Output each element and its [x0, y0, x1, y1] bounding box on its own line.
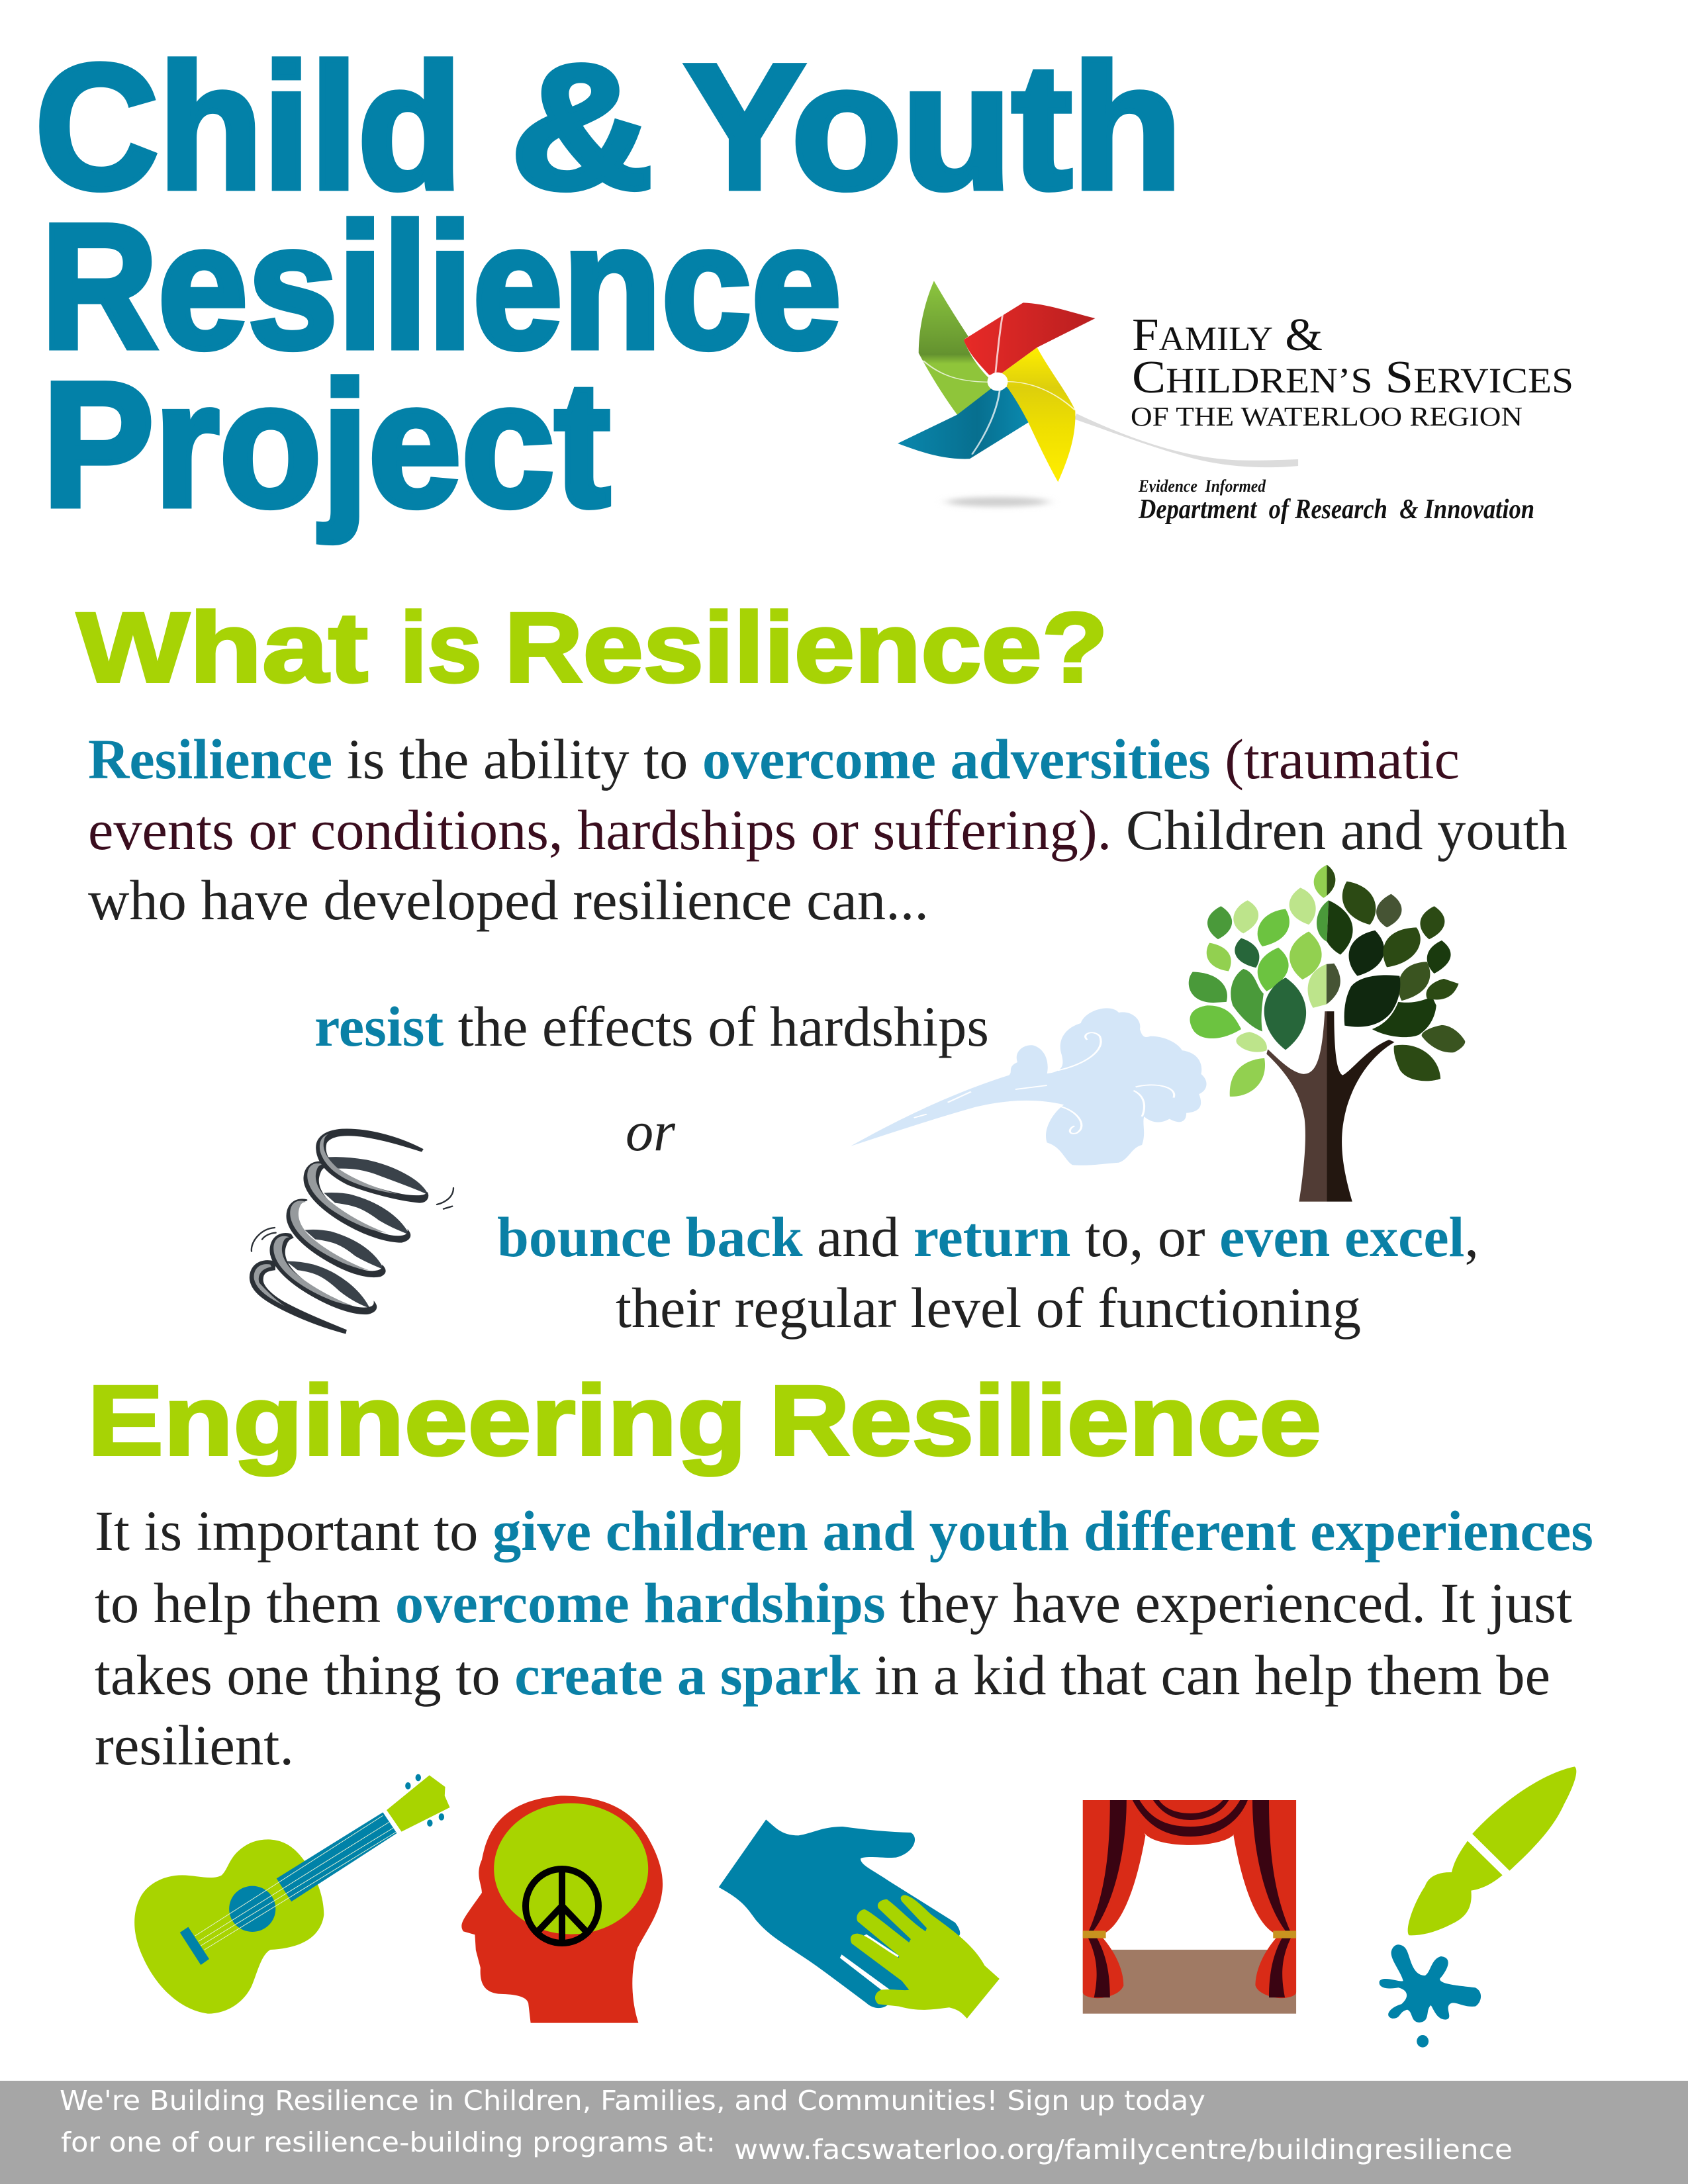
title: & — [510, 27, 653, 226]
icon: wind gust — [851, 1008, 1207, 1165]
title: Resilience — [41, 187, 841, 385]
text block: engineering resilience — [95, 1499, 1593, 1777]
footer text line 2: for one of our resilience-building programs at: — [61, 2126, 716, 2158]
text: bounce back and return: bounce back and return to, or even excel, — [497, 1205, 1479, 1269]
tree trunk — [1266, 1011, 1395, 1202]
text block: engineering resilience: takes one thing to create a spark in a kid that can help them be — [95, 1643, 1550, 1707]
heading: Engineering Resilience: Resilience — [769, 1365, 1321, 1476]
icon: guitar — [134, 1774, 450, 2014]
top coil — [316, 1130, 428, 1203]
coil back strands — [288, 1158, 427, 1307]
text block: definition of resilience: Resilience is the ability to overcome adversities (traumatic — [88, 727, 1460, 791]
text: bounce back and return: their regular level of functioning — [616, 1276, 1361, 1340]
text: resist the effects of hardships: resist the effects of hardships — [314, 995, 989, 1058]
footer bar — [0, 2081, 1688, 2184]
title — [35, 27, 1182, 545]
text block: definition of resilience: events or conditions, hardships or suffering). Children and youth — [88, 798, 1568, 862]
bottom coil — [250, 1261, 346, 1333]
icon: paint brush and splat — [1380, 1766, 1576, 2048]
heading: Engineering Resilience: Engineering — [87, 1365, 747, 1476]
motion lines — [252, 1188, 453, 1251]
logo text: of the Waterloo Region: OF THE WATERLOO REGION — [1131, 401, 1523, 432]
text: or: or — [626, 1099, 676, 1163]
heading: What is Resilience?: is — [400, 592, 482, 703]
icon: clasped hands — [719, 1819, 1000, 2019]
text block: engineering resilience: to help them overcome hardships they have experienced. It just — [95, 1571, 1572, 1635]
icon: bouncing spring — [250, 1130, 453, 1333]
text block: definition of resilience: who have developed resilience can... — [88, 868, 929, 932]
icon: theatre stage curtains — [1083, 1800, 1296, 2014]
title: Youth — [684, 27, 1182, 226]
text: bounce back and return — [497, 1205, 1479, 1340]
icon: head with peace sign — [461, 1796, 663, 2023]
logo text: Evidence Informed: Evidence Informed — [1138, 477, 1266, 496]
peace sign — [526, 1869, 598, 1943]
title: Child — [35, 27, 462, 226]
heading: What is Resilience?: Resilience? — [504, 592, 1108, 703]
text block: engineering resilience: It is important to give children and youth different experiences — [95, 1499, 1593, 1563]
logo text: Family &: FAMILY & — [1132, 310, 1323, 361]
footer URL: www.facswaterloo.org/familycentre/buildingresilience — [734, 2134, 1513, 2165]
heading: What is Resilience? — [77, 592, 1108, 703]
head silhouette — [461, 1796, 663, 2023]
middle coils — [270, 1234, 376, 1314]
heading: What is Resilience?: What — [77, 592, 368, 703]
logo text: Department of Research & Innovation: Department of Research & Innovation — [1138, 494, 1534, 525]
footer text line 1: We're Building Resilience in Children, Families, and Communities! Sign up today — [60, 2085, 1205, 2116]
text block: engineering resilience: resilient. — [95, 1713, 294, 1777]
logo text: Children's Services: CHILDREN’S SERVICES — [1132, 352, 1573, 403]
text block: definition of resilience — [88, 727, 1568, 932]
heading: Engineering Resilience — [87, 1365, 1321, 1476]
title: Project — [42, 345, 610, 545]
icon: tree — [1189, 865, 1465, 1202]
logo: Family & Children's Services — [898, 281, 1573, 525]
icon: pinwheel — [898, 281, 1298, 507]
tree leaves — [1189, 865, 1465, 1097]
